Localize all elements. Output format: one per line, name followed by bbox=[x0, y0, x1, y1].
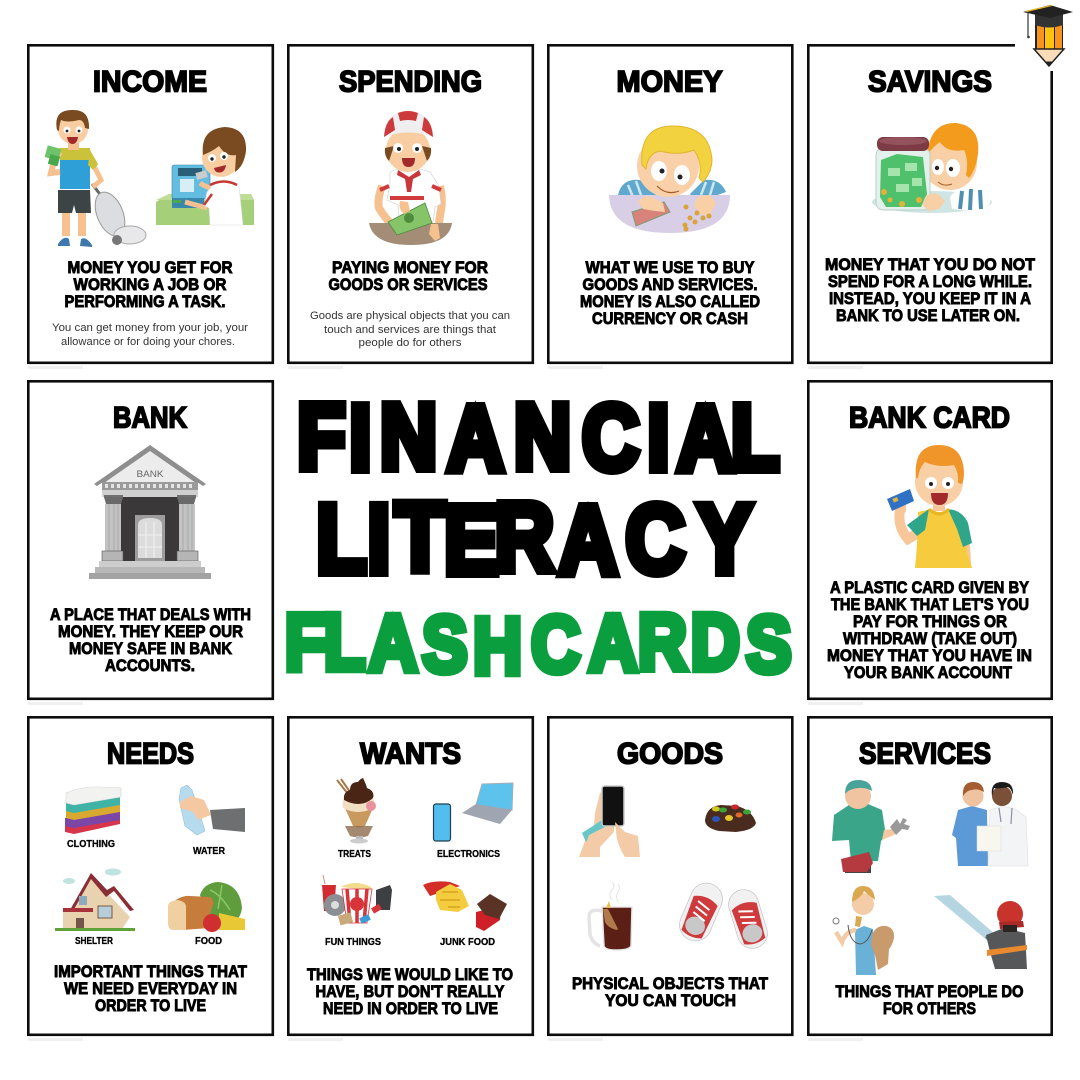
icon: red sneakers bbox=[675, 878, 771, 952]
wants card frame bbox=[288, 717, 533, 1035]
bank heading: BANK bbox=[113, 402, 187, 434]
panel: bank bbox=[28, 381, 273, 699]
illustration: boy holding a bank card bbox=[887, 445, 972, 568]
spending note bbox=[310, 310, 510, 349]
goods card frame bbox=[548, 717, 792, 1035]
icon: graduation cap pencil logo bbox=[1023, 5, 1073, 66]
main title bbox=[285, 386, 791, 691]
panel: goods bbox=[548, 717, 792, 1035]
label: junk food: JUNK FOOD bbox=[440, 937, 495, 948]
icon: firefighter with hose bbox=[934, 895, 1027, 969]
savings definition: BANK TO USE LATER ON. bbox=[836, 307, 1020, 325]
icon: food bbox=[168, 882, 245, 932]
spending definition: GOODS OR SERVICES bbox=[328, 276, 488, 294]
bank card definition: A PLASTIC CARD GIVEN BY bbox=[830, 579, 1029, 597]
wants definition bbox=[307, 966, 513, 1018]
services definition: FOR OTHERS bbox=[883, 1000, 976, 1018]
icon: chocolate candy cookie bbox=[705, 804, 756, 832]
label: food: FOOD bbox=[195, 936, 222, 947]
bank definition: A PLACE THAT DEALS WITH bbox=[50, 606, 251, 624]
label: shelter: SHELTER bbox=[75, 936, 114, 947]
icon: nurse and doctor bbox=[952, 782, 1028, 866]
wants definition: NEED IN ORDER TO LIVE bbox=[323, 1000, 498, 1018]
panel: bank card bbox=[808, 381, 1052, 699]
panel: wants bbox=[288, 717, 533, 1035]
label: water: WATER bbox=[193, 846, 226, 857]
bank definition: MONEY SAFE IN BANK bbox=[69, 640, 232, 658]
money definition: WHAT WE USE TO BUY bbox=[586, 259, 755, 277]
wants definition: THINGS WE WOULD LIKE TO bbox=[307, 966, 513, 984]
income note: You can get money from your job, your bbox=[52, 322, 248, 334]
money definition: CURRENCY OR CASH bbox=[592, 310, 748, 328]
spending heading: SPENDING bbox=[339, 66, 482, 98]
needs definition: ORDER TO LIVE bbox=[95, 997, 206, 1015]
illustration: boy with vacuum and boy at cash register bbox=[45, 110, 254, 247]
money definition: MONEY IS ALSO CALLED bbox=[580, 293, 760, 311]
income note bbox=[52, 322, 248, 348]
savings definition: SPEND FOR A LONG WHILE. bbox=[828, 273, 1032, 291]
label: electronics: ELECTRONICS bbox=[437, 849, 500, 860]
icon: mug of tea bbox=[589, 882, 632, 950]
icon: water bottle in hand bbox=[179, 785, 245, 835]
money heading: MONEY bbox=[616, 66, 722, 98]
money card frame bbox=[548, 45, 792, 363]
spending note: touch and services are things that bbox=[324, 324, 496, 336]
services definition: THINGS THAT PEOPLE DO bbox=[836, 983, 1024, 1001]
income heading: INCOME bbox=[93, 66, 207, 98]
income note: allowance or for doing your chores. bbox=[61, 336, 235, 348]
spending definition: PAYING MONEY FOR bbox=[332, 259, 488, 277]
panel: services bbox=[808, 717, 1052, 1035]
bank card frame bbox=[28, 381, 273, 699]
icon: phone and laptop bbox=[434, 783, 513, 841]
bank card definition: MONEY THAT YOU HAVE IN bbox=[827, 647, 1032, 665]
spending note: Goods are physical objects that you can bbox=[310, 310, 510, 322]
spending card frame bbox=[288, 45, 533, 363]
bank definition bbox=[50, 606, 251, 675]
panel: savings bbox=[808, 45, 1052, 363]
goods definition: YOU CAN TOUCH bbox=[605, 992, 736, 1010]
savings card frame, open at the top right corner bbox=[808, 45, 1052, 363]
needs definition bbox=[54, 963, 247, 1015]
bank definition: MONEY. THEY KEEP OUR bbox=[58, 623, 243, 641]
savings definition bbox=[825, 256, 1035, 325]
panel: income bbox=[28, 45, 273, 363]
bank card definition bbox=[827, 579, 1032, 682]
income card frame bbox=[28, 45, 273, 363]
bank card definition: THE BANK THAT LET'S YOU bbox=[831, 596, 1029, 614]
goods definition: PHYSICAL OBJECTS THAT bbox=[572, 975, 768, 993]
illustration: boy hugging a money jar bbox=[872, 123, 992, 213]
income definition bbox=[64, 259, 233, 311]
icon: ice cream treat bbox=[337, 778, 376, 844]
goods heading: GOODS bbox=[617, 738, 723, 770]
services card frame bbox=[808, 717, 1052, 1035]
icon: hands holding a smartphone bbox=[579, 786, 640, 857]
label: fun things: FUN THINGS bbox=[325, 937, 381, 948]
icon: chips and chocolate bbox=[423, 881, 507, 931]
title line: financial: FINANCIAL bbox=[297, 386, 779, 491]
title line: literacy: LITERACY bbox=[316, 484, 752, 595]
icon: clothing bbox=[65, 787, 121, 834]
needs definition: IMPORTANT THINGS THAT bbox=[54, 963, 247, 981]
icon: house bbox=[55, 868, 135, 931]
panel: spending bbox=[288, 45, 533, 363]
savings heading: SAVINGS bbox=[868, 66, 992, 98]
spending note: people do for others bbox=[358, 337, 462, 349]
illustration: bank building: BANK bbox=[136, 469, 164, 479]
income definition: MONEY YOU GET FOR bbox=[68, 259, 233, 277]
panel: money bbox=[548, 45, 792, 363]
services heading: SERVICES bbox=[859, 738, 991, 770]
label: clothing: CLOTHING bbox=[67, 839, 115, 850]
icon: plumber with toolbox bbox=[832, 780, 910, 873]
bank card heading: BANK CARD bbox=[849, 402, 1010, 434]
bank definition: ACCOUNTS. bbox=[105, 657, 195, 675]
panel: needs bbox=[28, 717, 273, 1035]
services definition bbox=[836, 983, 1024, 1018]
income definition: PERFORMING A TASK. bbox=[64, 293, 226, 311]
needs definition: WE NEED EVERYDAY IN bbox=[64, 980, 237, 998]
needs heading: NEEDS bbox=[107, 738, 194, 770]
bank card definition: YOUR BANK ACCOUNT bbox=[844, 664, 1012, 682]
illustration: child counting coins bbox=[609, 126, 730, 233]
icon: vet with dog bbox=[833, 886, 894, 975]
illustration: boy paying with money bbox=[369, 111, 452, 245]
label: treats: TREATS bbox=[338, 849, 371, 860]
savings definition: INSTEAD, YOU KEEP IT IN A bbox=[829, 290, 1031, 308]
bank card definition: WITHDRAW (TAKE OUT) bbox=[843, 630, 1017, 648]
goods definition bbox=[572, 975, 768, 1010]
icon: popcorn, film and drink bbox=[322, 875, 392, 925]
bank card frame bbox=[808, 381, 1052, 699]
wants heading: WANTS bbox=[360, 738, 461, 770]
spending definition bbox=[328, 259, 488, 294]
income definition: WORKING A JOB OR bbox=[74, 276, 227, 294]
savings definition: MONEY THAT YOU DO NOT bbox=[825, 256, 1035, 274]
wants definition: HAVE, BUT DON'T REALLY bbox=[316, 983, 505, 1001]
illustration: bank building bbox=[89, 445, 211, 579]
title line: flashcards: FLASHCARDS bbox=[285, 597, 791, 691]
money definition: GOODS AND SERVICES. bbox=[582, 276, 758, 294]
bank card definition: PAY FOR THINGS OR bbox=[853, 613, 1007, 631]
money definition bbox=[580, 259, 760, 328]
needs card frame bbox=[28, 717, 273, 1035]
